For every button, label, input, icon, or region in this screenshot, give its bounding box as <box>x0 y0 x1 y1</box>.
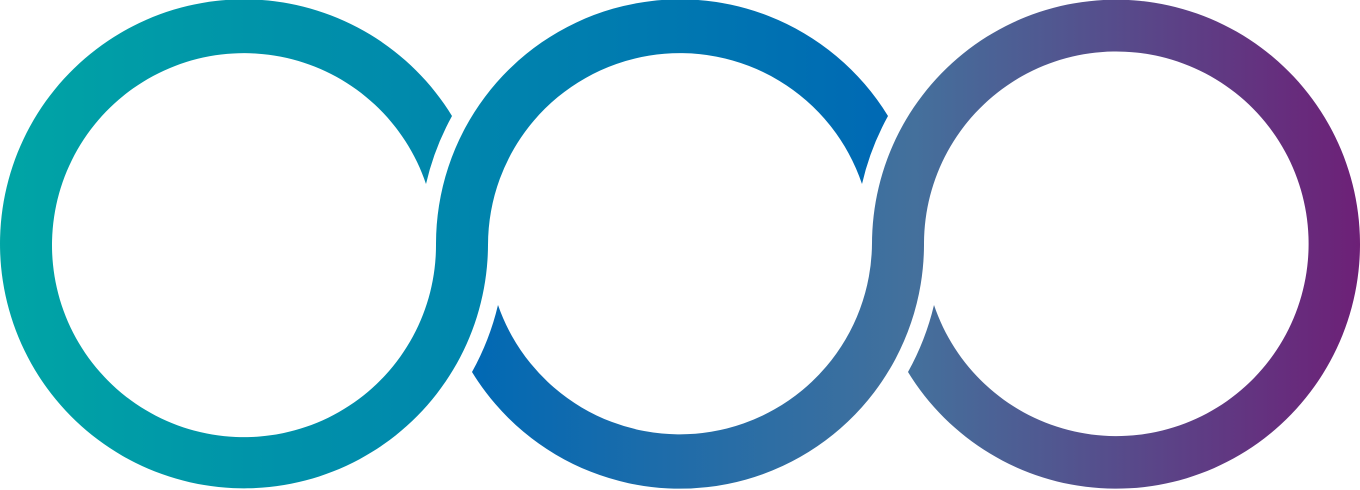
ribbon: teal to blue, left ring into upper middle ring <box>0 0 888 488</box>
ribbon: blue to purple, lower middle ring into right ring <box>472 0 1360 489</box>
